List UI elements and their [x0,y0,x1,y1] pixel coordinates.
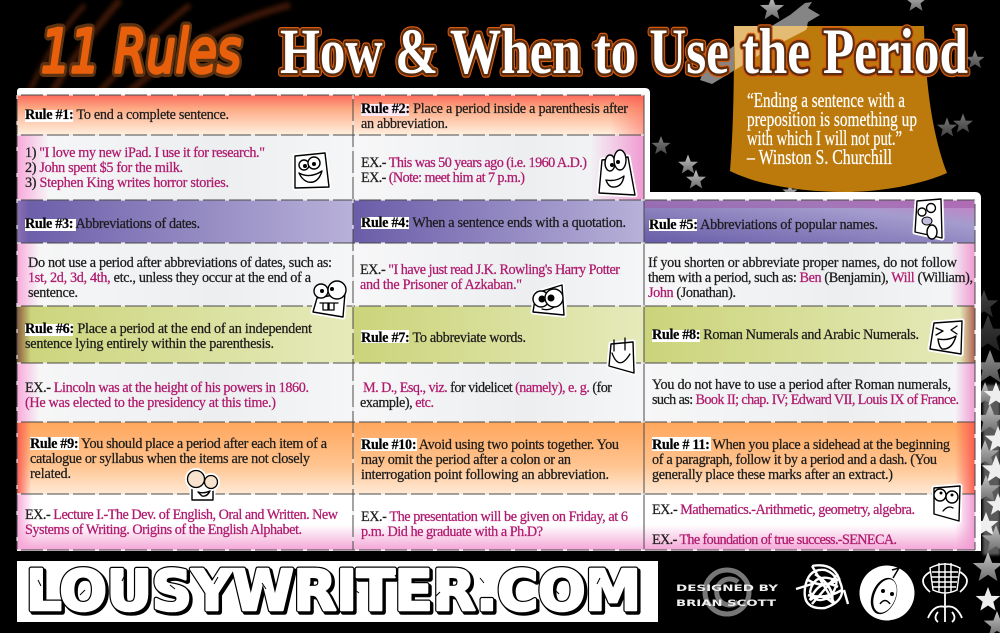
panel: rule 10 [353,422,644,550]
panel: rule 9: EX.- Lecture I.-The Dev. of English, Oral and Written. New [25,507,339,523]
panel: rule 2: EX.- This was 50 years ago (i.e. 1960 A.D.) [361,155,587,171]
logo: scribble [796,565,848,608]
icon: face rule 9 [188,470,218,500]
quote text: preposition is something up [747,107,917,131]
panel: rule 3: 1st, 2d, 3d, 4th, etc., unless they occur at the end of a [28,270,312,286]
panel: rule 6: Rule #6: Place a period at the end of an independent [25,321,312,337]
panel: rule 5: If you shorten or abbreviate proper names, do not follow [648,255,958,271]
panel: rule 11: of a paragraph, follow it by a period and a dash. (You [652,452,937,468]
logo: figure [923,563,967,622]
gray brush stroke behind note [700,2,820,84]
icon: face rule 2 [599,150,635,195]
panel: rule 3: sentence. [28,285,78,301]
panel: rule 11: generally place these marks after an extract.) [652,467,893,483]
panel: rule 5: Rule #5: Abbreviations of popular names. [649,217,878,233]
star field [652,0,1000,633]
panel: rule 6 [17,306,353,422]
panel: rule 9: Systems of Writing. Origins of the English Alphabet. [25,522,302,538]
panel: rule 6: EX.- Lincoln was at the height of his powers in 1860. [25,380,309,396]
orange light streaks [20,0,290,150]
panel: rule 9: catalogue or syllabus when the items are not closely [30,451,311,467]
designer credit: BRIAN SCOTT [676,599,777,609]
panel: rule 9: related. [30,466,71,482]
panel: rule 3: Do not use a period after abbreviations of dates, such as: [28,255,332,271]
panel: rule 10: EX.- The presentation will be given on Friday, at 6 [361,509,628,525]
panel: rule 11: EX.- Mathematics.-Arithmetic, geometry, algebra. [652,502,915,518]
logo: round face [860,566,914,620]
panel: rule 1: 3) Stephen King writes horror stories. [25,175,229,191]
icon: face rule 3 [313,281,346,317]
quote text: – Winston S. Churchill [746,145,892,169]
white panel backing [17,88,981,551]
panel: rule 11: Rule # 11: When you place a sidehead at the beginning [652,437,950,453]
icon: face rule 1 [295,153,329,188]
panel: rule 4: EX.- "I have just read J.K. Rowling's Harry Potter [360,262,620,278]
panel: rule 1 [17,95,353,200]
panel: rule 11: EX.- The foundation of true success.-SENECA. [652,532,897,548]
panel: rule 3 [17,200,353,306]
panel: rule 7: Rule #7: To abbreviate words. [361,330,526,346]
panel: rule 10: may omit the period after a colon or an [361,452,571,468]
panel: rule 1: Rule #1: To end a complete sentence. [25,107,229,123]
panel: rule 8: such as: Book II; chap. IV; Edward VII, Louis IX of France. [652,392,959,408]
panel: rule 10: Rule #10: Avoid using two points together. You [361,437,619,453]
icon: face rule 5 [915,199,942,239]
icon: face rule 11 [934,486,960,521]
panel: rule 4 [353,200,644,306]
panel: rule 7: M. D., Esq., viz. for videlicet (namely), e. g. (for [363,380,612,396]
panel: rule 4: Rule #4: When a sentence ends with a quotation. [361,215,626,231]
panel: rule 5: them with a period, such as: Ben (Benjamin), Will (William), [648,270,973,286]
panel: rule 1: 1) "I love my new iPad. I use it for research." [25,145,265,161]
title: 11 Rules: 11 Rules [41,17,241,87]
icon: face rule 8 [930,321,962,354]
designer credit [676,584,779,609]
panel: rule 6: (He was elected to the presidency at this time.) [25,395,276,411]
panel: rule 10: p.m. Did he graduate with a Ph.D? [361,524,543,540]
panel: rule 10: interrogation point following an abbreviation. [361,467,609,483]
panel: rule 7: example), etc. [360,395,434,411]
quote text: “Ending a sentence with a [747,88,905,112]
panel: rule 7 [353,306,644,422]
panel: rule 11 [644,422,975,550]
copyright symbol [705,570,749,614]
banner: LOUSYWRITER.COM: LOUSYWRITER.COM [28,561,643,626]
panel: rule 2: EX.- (Note: meet him at 7 p.m.) [361,170,525,186]
quote text [746,88,917,169]
panel: rule 1: 2) John spent $5 for the milk. [25,160,183,176]
banner: LOUSYWRITER.COM: LOUSYWRITER.COM [26,559,641,624]
banner: LOUSYWRITER.COM: LOUSYWRITER.COM [26,559,641,624]
panel: rule 9: Rule #9: You should place a period after each item of a [30,436,328,452]
panel: rule 9 [17,422,353,550]
panel: rule 8: Rule #8: Roman Numerals and Arabic Numerals. [652,327,919,343]
panel: rule 5: John (Jonathan). [648,285,736,301]
quote note [730,26,947,192]
quote text: with which I will not put.” [747,126,902,150]
icon: face rule 7 [609,338,634,373]
panel: rule 4: and the Prisoner of Azkaban." [360,277,522,293]
designer credit: DESIGNED BY [676,584,779,594]
panel: rule 2: an abbreviation. [361,116,448,132]
title: 11 Rules: 11 Rules [41,17,241,87]
panel: rule 2: Rule #2: Place a period inside a parenthesis after [361,101,628,117]
panel: rule 6: sentence lying entirely within the parenthesis. [25,336,274,352]
panel: rule 5 [644,200,975,306]
panel: rule 3: Rule #3: Abbreviations of dates. [25,216,200,232]
icon: face rule 4 [533,285,564,315]
panel: rule 8: You do not have to use a period after Roman numerals, [652,377,951,393]
panel: rule 2 [353,95,644,200]
panel: rule 8 [644,306,975,422]
